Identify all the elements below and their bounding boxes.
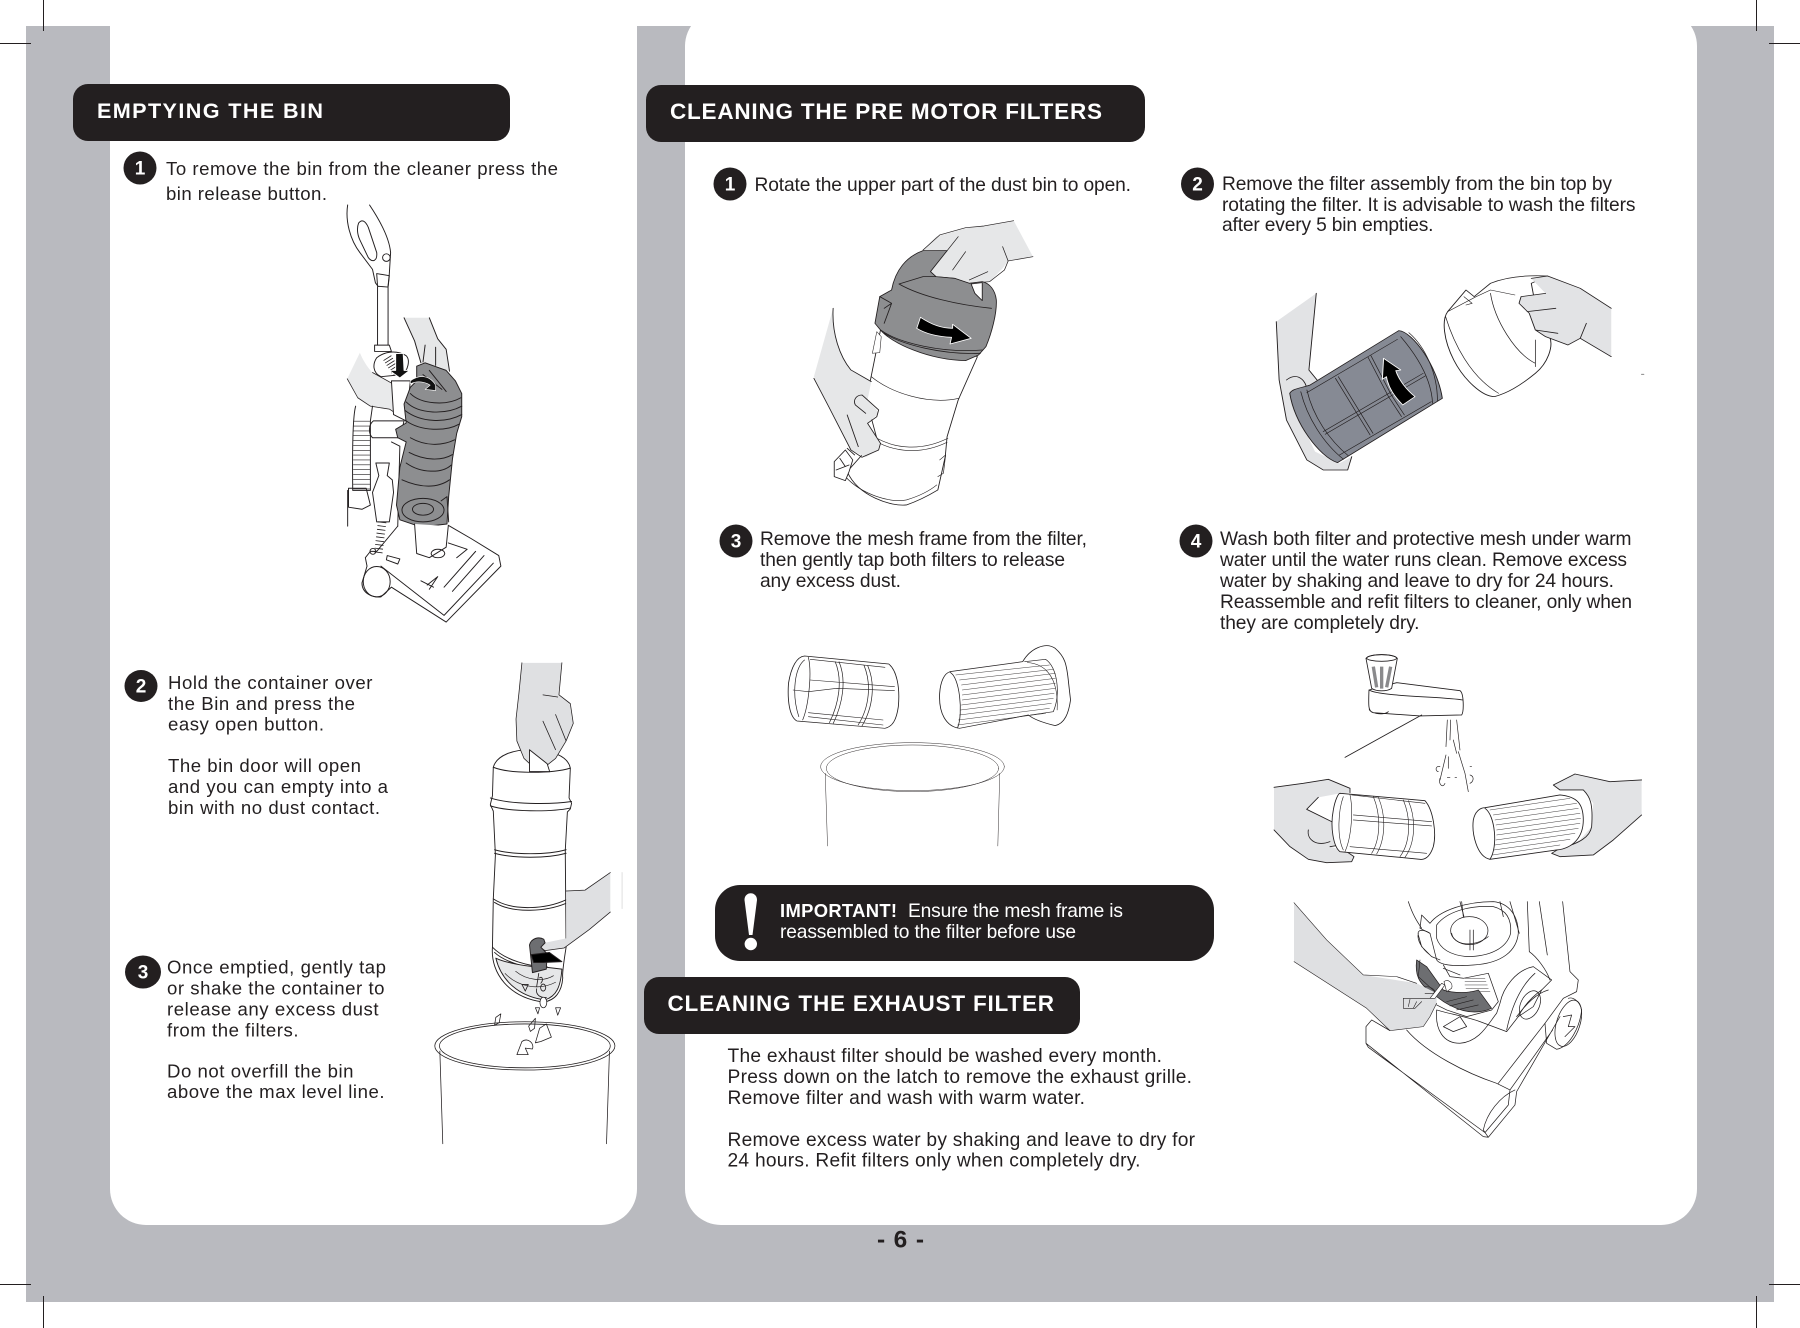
illustration: filter removed from bin top xyxy=(1276,276,1644,470)
text: emptying step 3: or shake the container to xyxy=(167,978,384,998)
text: exhaust filter instructions: The exhaust filter should be washed every month. xyxy=(728,1046,1162,1067)
text: pre motor step 2: Remove the filter assembly from the bin top by xyxy=(1222,174,1612,195)
text: pre motor step 2: after every 5 bin empties. xyxy=(1222,215,1434,236)
text: pre motor step 4: Reassemble and refit filters to cleaner, only when xyxy=(1220,592,1632,613)
illustration: removing the exhaust grille xyxy=(1294,902,1587,1137)
illustration: rotating the dust bin top xyxy=(814,221,1033,505)
heading: emptying the bin: EMPTYING THE BIN xyxy=(97,98,323,123)
step 3 badge: emptying xyxy=(125,956,161,988)
text: emptying step 1 xyxy=(166,158,558,204)
heading: cleaning the exhaust filter xyxy=(644,977,1080,1034)
text: emptying step 3: Once emptied, gently tap xyxy=(167,956,386,978)
text: exhaust filter instructions: 24 hours. Refit filters only when completely dry. xyxy=(728,1150,1140,1172)
text: emptying step 2: easy open button. xyxy=(168,714,324,734)
illustration: tapping filters over a bin xyxy=(788,646,1071,846)
text: emptying step 2: The bin door will open xyxy=(168,755,361,776)
heading: cleaning the pre motor filters xyxy=(646,85,1145,142)
text: emptying step 2: the Bin and press the xyxy=(168,693,355,714)
text: pre motor step 3 xyxy=(760,529,1087,592)
text: emptying step 3: release any excess dust xyxy=(167,998,379,1020)
text: pre motor step 4 xyxy=(1219,529,1632,634)
text: pre motor step 3: any excess dust. xyxy=(760,571,901,592)
step 3 badge: pre motor xyxy=(720,524,752,558)
panel: right white page xyxy=(685,10,1697,1225)
text: emptying step 2 xyxy=(168,672,389,818)
text: pre motor step 1: Rotate the upper part of the dust bin to open. xyxy=(754,175,1131,196)
illustration: upright vacuum with bin release xyxy=(347,205,501,622)
step 2 badge: emptying xyxy=(124,670,158,702)
text: exhaust filter instructions xyxy=(728,1046,1196,1172)
step 4 badge: pre motor: 4 xyxy=(1191,532,1202,552)
step 3 badge: pre motor: 3 xyxy=(731,532,741,552)
step 1 badge: pre motor: 1 xyxy=(725,174,736,196)
text: pre motor step 4: water by shaking and leave to dry for 24 hours. xyxy=(1219,571,1614,592)
callout: important note: Ensure the mesh frame is xyxy=(908,901,1123,922)
heading: emptying the bin xyxy=(73,84,510,141)
text: pre motor step 3: Remove the mesh frame from the filter, xyxy=(760,529,1087,550)
callout: important note: IMPORTANT! xyxy=(780,900,897,921)
text: pre motor step 2: rotating the filter. It is advisable to wash the filters xyxy=(1222,195,1636,216)
step 2 badge: emptying: 2 xyxy=(136,676,146,698)
text: emptying step 2: bin with no dust contact. xyxy=(168,797,380,818)
page number: - 6 - xyxy=(877,1226,924,1254)
text: pre motor step 4: they are completely dry. xyxy=(1220,613,1420,634)
step 4 badge: pre motor xyxy=(1180,524,1212,558)
step 2 badge: pre motor xyxy=(1181,168,1214,200)
text: emptying step 1: To remove the bin from the cleaner press the xyxy=(166,158,558,179)
step 3 badge: emptying: 3 xyxy=(138,962,148,984)
text: emptying step 2: and you can empty into a xyxy=(168,776,389,797)
heading: cleaning the exhaust filter: CLEANING THE EXHAUST FILTER xyxy=(668,991,1054,1016)
text: pre motor step 3: then gently tap both filters to release xyxy=(760,550,1065,571)
text: emptying step 2: Hold the container over xyxy=(168,672,372,693)
text: emptying step 3 xyxy=(167,956,386,1102)
text: exhaust filter instructions: Press down on the latch to remove the exhaust grille. xyxy=(728,1067,1192,1088)
text: exhaust filter instructions: Remove filter and wash with warm water. xyxy=(728,1088,1085,1109)
text: exhaust filter instructions: Remove excess water by shaking and leave to dry for xyxy=(728,1130,1196,1151)
step 1 badge: pre motor xyxy=(714,168,746,200)
text: pre motor step 4: Wash both filter and protective mesh under warm xyxy=(1220,529,1632,550)
text: pre motor step 2 xyxy=(1222,174,1636,236)
illustration: washing filters under the tap xyxy=(1274,655,1642,863)
text: emptying step 3: from the filters. xyxy=(167,1020,298,1040)
step 2 badge: pre motor: 2 xyxy=(1192,174,1203,196)
text: emptying step 3: above the max level line. xyxy=(167,1081,384,1102)
callout: important note xyxy=(715,885,1214,961)
icon: exclamation mark xyxy=(744,893,757,950)
step 1 badge: emptying: 1 xyxy=(135,158,146,180)
callout: important note: reassembled to the filter before use xyxy=(780,922,1076,943)
heading: cleaning the pre motor filters: CLEANING THE PRE MOTOR FILTERS xyxy=(670,99,1102,124)
text: emptying step 3: Do not overfill the bin xyxy=(167,1060,354,1082)
text: emptying step 1: bin release button. xyxy=(166,183,327,204)
panel: left white page xyxy=(110,0,637,1225)
step 1 badge: emptying xyxy=(124,152,156,184)
text: pre motor step 4: water until the water runs clean. Remove excess xyxy=(1219,550,1627,571)
illustration: bin held over trash can xyxy=(435,663,622,1144)
